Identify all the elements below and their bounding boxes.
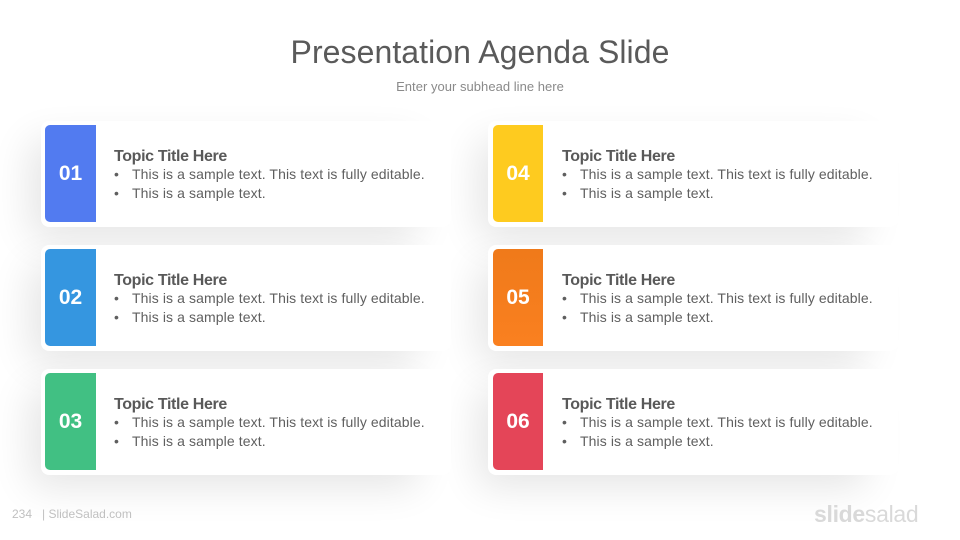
bullet text 05: • xyxy=(562,308,567,324)
number 01: 01 xyxy=(59,162,82,185)
bullet text 01: This is a sample text. xyxy=(132,184,266,200)
panel: topic 01 xyxy=(41,121,451,227)
panel: topic 05 xyxy=(488,245,898,351)
topic title 02: Topic Title Here xyxy=(114,272,227,289)
number 03 xyxy=(45,373,96,470)
bullet text 05: This is a sample text. xyxy=(580,308,714,324)
bullet text 03: This is a sample text. This text is fully editable. xyxy=(132,414,425,430)
logo wordmark: slidesalad xyxy=(814,501,918,527)
number 06 xyxy=(493,373,543,470)
bullet text 01: • xyxy=(114,166,119,182)
shadow: card 04 xyxy=(478,140,866,239)
panel: topic 03 xyxy=(41,369,451,475)
bullet text 01 xyxy=(114,166,425,201)
topic title 04: Topic Title Here xyxy=(562,148,675,165)
bullet text 01: This is a sample text. This text is fully editable. xyxy=(132,166,425,182)
subhead: Enter your subhead line here xyxy=(396,79,564,94)
topic title 01: Topic Title Here xyxy=(114,148,227,165)
bullet text 02: • xyxy=(114,308,119,324)
bullet text 01: • xyxy=(114,184,119,200)
bullet text 03: • xyxy=(114,432,119,448)
bullet text 02: This is a sample text. xyxy=(132,308,266,324)
bullet text 06 xyxy=(562,414,873,449)
number 06: 06 xyxy=(506,410,530,433)
bullet text 04 xyxy=(562,166,873,201)
number 05 xyxy=(493,249,543,346)
panel: topic 02 xyxy=(41,245,451,351)
bullet text 03: • xyxy=(114,414,119,430)
number 03: 03 xyxy=(59,410,82,433)
number 02 xyxy=(45,249,96,346)
bullet text 06: This is a sample text. This text is fully editable. xyxy=(580,414,873,430)
bullet text 06: • xyxy=(562,432,567,448)
shadow: card 06 xyxy=(478,388,866,487)
bullet text 04: • xyxy=(562,166,567,182)
bullet text 02: • xyxy=(114,290,119,306)
shadow: card 03 xyxy=(30,388,418,487)
bullet text 04: This is a sample text. This text is fully editable. xyxy=(580,166,873,182)
number 01 xyxy=(45,125,96,222)
bullet text 02 xyxy=(114,290,425,325)
bullet text 05: This is a sample text. This text is fully editable. xyxy=(580,290,873,306)
bullet text 05: • xyxy=(562,290,567,306)
bullet text 04: • xyxy=(562,184,567,200)
shadow: card 05 xyxy=(478,264,866,363)
page number and footer text: 234 | SlideSalad.com xyxy=(12,507,132,521)
shadow: card 02 xyxy=(30,264,418,363)
topic title 05: Topic Title Here xyxy=(562,272,675,289)
shadow: card 01 xyxy=(30,140,418,239)
title: Presentation Agenda Slide xyxy=(291,34,669,70)
panel: topic 04 xyxy=(488,121,898,227)
number 04: 04 xyxy=(506,162,530,185)
panel: topic 06 xyxy=(488,369,898,475)
bullet text 02: This is a sample text. This text is fully editable. xyxy=(132,290,425,306)
bullet text 06: • xyxy=(562,414,567,430)
bullet text 06: This is a sample text. xyxy=(580,432,714,448)
bullet text 05 xyxy=(562,290,873,325)
topic title 06: Topic Title Here xyxy=(562,396,675,413)
number 04 xyxy=(493,125,543,222)
number 05: 05 xyxy=(506,286,530,309)
number 02: 02 xyxy=(59,286,82,309)
bullet text 03 xyxy=(114,414,425,449)
bullet text 04: This is a sample text. xyxy=(580,184,714,200)
topic title 03: Topic Title Here xyxy=(114,396,227,413)
bullet text 03: This is a sample text. xyxy=(132,432,266,448)
